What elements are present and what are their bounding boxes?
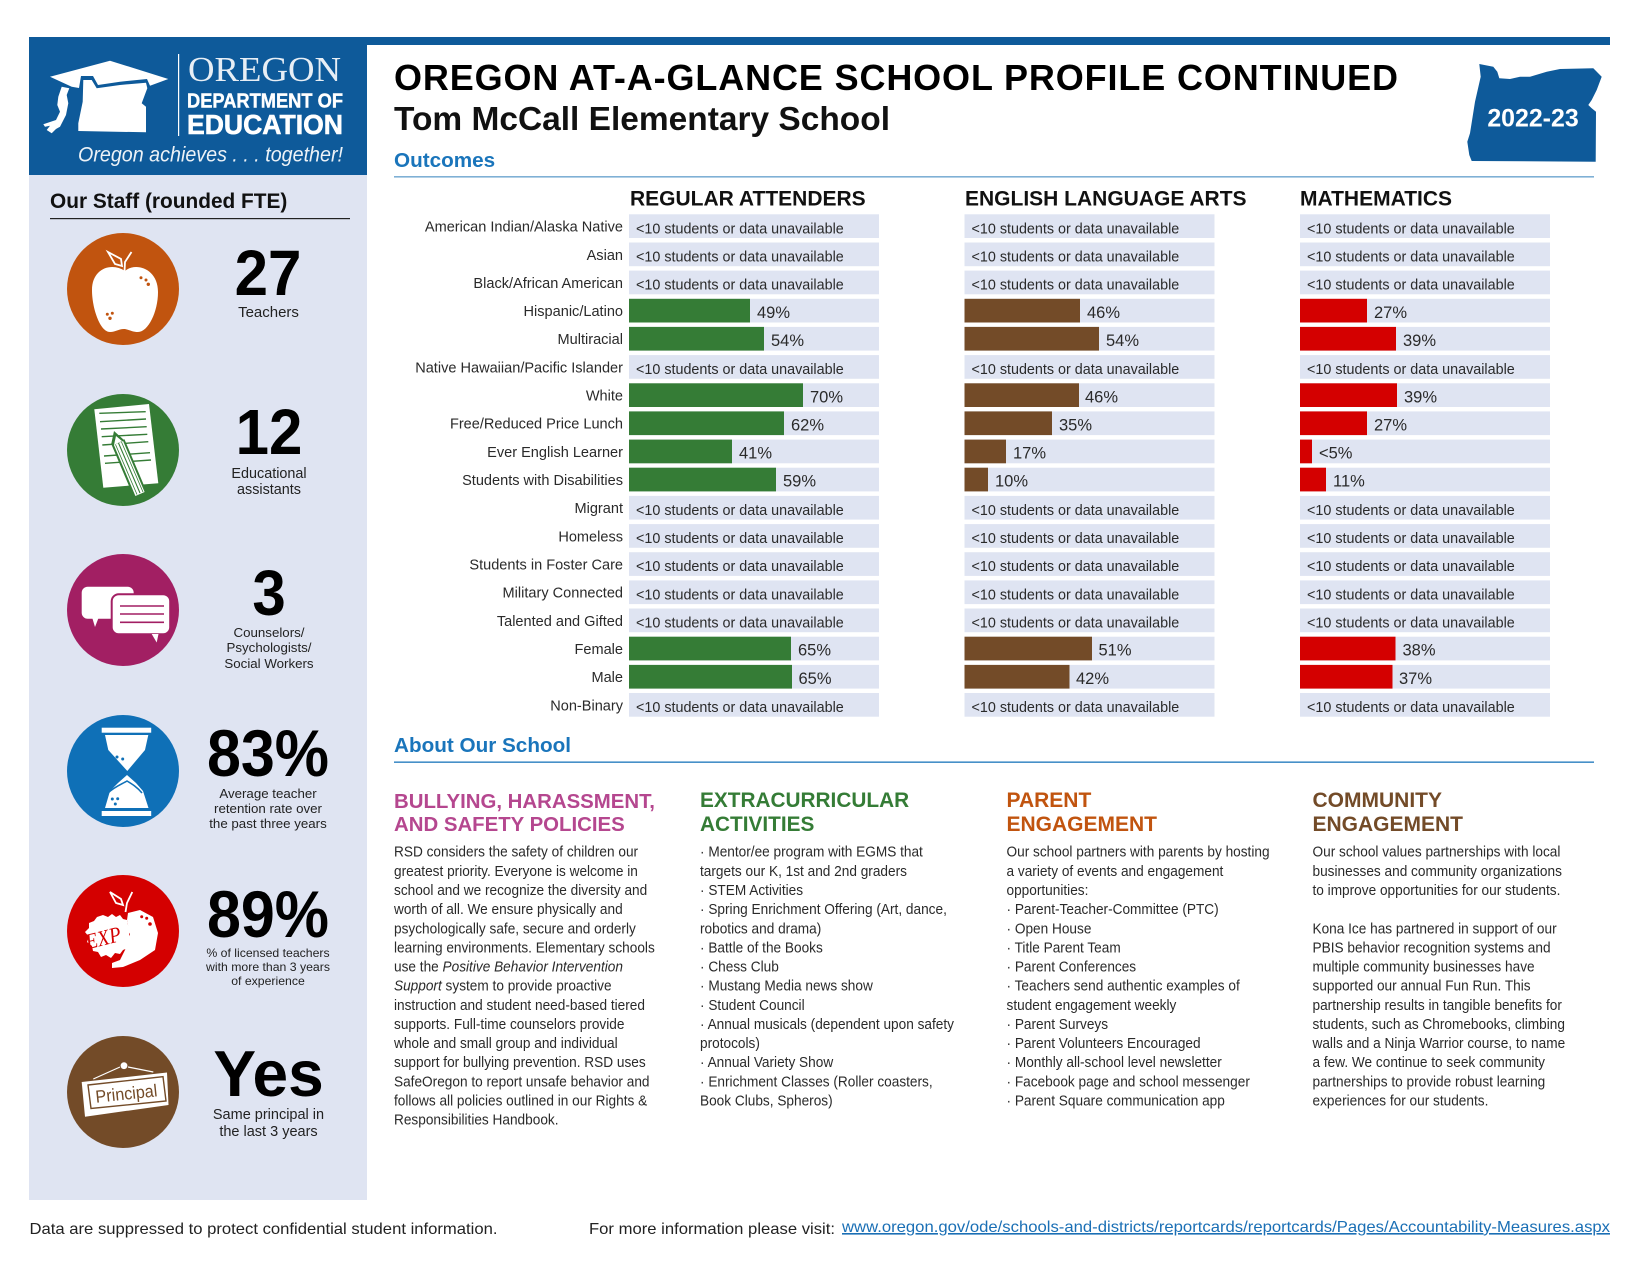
group labels for the outcomes charts: Ever English Learner	[487, 445, 623, 461]
logo: Oregon Department of Education: Oregon achieves . . . together!	[78, 144, 343, 166]
chart values	[972, 221, 1179, 716]
caption: teachers: Teachers	[238, 304, 299, 321]
group labels for the outcomes charts: American Indian/Alaska Native	[425, 220, 623, 236]
heading: About Our School: About Our School	[394, 734, 571, 757]
group labels for the outcomes charts: Students in Foster Care	[469, 558, 623, 574]
chart values: <10 students or data unavailable	[636, 278, 844, 294]
body copy: · Parent Surveys	[1006, 1016, 1108, 1033]
chart values: <10 students or data unavailable	[972, 503, 1179, 519]
stat: educational assistants	[67, 394, 307, 506]
body copy: Support system to provide proactive	[394, 978, 612, 995]
group labels for the outcomes charts: Male	[591, 670, 623, 686]
body copy: · Chess Club	[700, 959, 779, 976]
body copy: psychologically safe, secure and orderly	[394, 921, 637, 937]
caption: counselors: Counselors/	[234, 625, 305, 640]
chart values: 17%	[1013, 445, 1046, 463]
logo: Oregon Department of Education: EDUCATION	[187, 109, 343, 140]
text block: bullying, harassment and safety policies	[393, 791, 655, 1129]
body copy: Book Clubs, Spheros)	[700, 1093, 833, 1110]
caption: experience: with more than 3 years	[205, 960, 330, 974]
group labels for the outcomes charts	[415, 220, 624, 714]
chart values: <5%	[1319, 445, 1353, 463]
icon: bitten apple with EXP: EXP	[82, 921, 124, 954]
chart values: <10 students or data unavailable	[1307, 250, 1515, 266]
body copy: students, such as Chromebooks, climbing	[1312, 1016, 1565, 1033]
chart values: 42%	[1076, 670, 1109, 688]
body copy: · Monthly all-school level newsletter	[1006, 1055, 1222, 1071]
icon: Oregon map with school year: 2022-23	[1487, 104, 1579, 132]
chart values: 70%	[810, 388, 843, 406]
body copy: robotics and drama)	[700, 921, 821, 937]
body copy: Responsibilities Handbook.	[394, 1112, 559, 1129]
chart values: 27%	[1374, 416, 1407, 434]
body copy: · Mustang Media news show	[700, 978, 873, 995]
chart values: 39%	[1403, 332, 1436, 350]
body copy: learning environments. Elementary schools	[394, 940, 655, 957]
body copy	[393, 844, 655, 1129]
chart values: 39%	[1404, 388, 1437, 406]
chart values: <10 students or data unavailable	[1307, 616, 1515, 632]
chart values: <10 students or data unavailable	[972, 616, 1179, 632]
chart values: <10 students or data unavailable	[1307, 278, 1515, 294]
group labels for the outcomes charts: Black/African American	[473, 276, 623, 292]
stat: counselors	[67, 554, 314, 671]
body copy: whole and small group and individual	[393, 1036, 618, 1052]
chart values: <10 students or data unavailable	[972, 559, 1179, 575]
caption: counselors: Social Workers	[224, 656, 314, 671]
chart title: ENGLISH LANGUAGE ARTS	[965, 188, 1247, 211]
icon: principal sign	[67, 1036, 179, 1148]
body copy: · Parent-Teacher-Committee (PTC)	[1006, 902, 1219, 918]
icon: bitten apple with EXP	[67, 875, 179, 987]
icon: apple	[67, 233, 179, 345]
body copy: walls and a Ninja Warrior course, to name	[1312, 1036, 1565, 1052]
chart values: <10 students or data unavailable	[1307, 531, 1515, 547]
body copy: partnerships to provide robust learning	[1312, 1074, 1545, 1091]
body copy: Kona Ice has partnered in support of our	[1312, 921, 1557, 937]
caption: counselors: Psychologists/	[226, 640, 312, 655]
group labels for the outcomes charts: Multiracial	[558, 332, 623, 348]
chart values: 65%	[798, 642, 831, 660]
chart values: 27%	[1374, 304, 1407, 322]
chart values: <10 students or data unavailable	[636, 700, 844, 716]
body copy: · Enrichment Classes (Roller coasters,	[700, 1074, 933, 1091]
chart track backgrounds	[629, 214, 879, 717]
chart values: <10 students or data unavailable	[972, 531, 1179, 547]
text block: parent engagement	[1006, 789, 1270, 1110]
body copy: multiple community businesses have	[1312, 959, 1535, 976]
body copy: opportunities:	[1006, 882, 1088, 899]
chart title: MATHEMATICS	[1300, 188, 1452, 211]
caption: experience: % of licensed teachers	[206, 946, 330, 960]
logo: Oregon Department of Education	[29, 37, 367, 175]
heading: AND SAFETY POLICIES	[394, 814, 625, 836]
chart values: 41%	[739, 445, 772, 463]
body copy: · Annual Variety Show	[700, 1055, 834, 1071]
chart values: 46%	[1085, 388, 1118, 406]
body copy: · Parent Volunteers Encouraged	[1006, 1036, 1201, 1052]
chart values: 49%	[757, 304, 790, 322]
caption: educational assistants: Educational	[231, 466, 307, 482]
value: 89%: 89%	[207, 879, 329, 952]
body copy: supported our annual Fun Run. This	[1312, 978, 1531, 995]
body copy: · Mentor/ee program with EGMS that	[700, 844, 923, 861]
body copy: follows all policies outlined in our Rights &	[394, 1093, 648, 1110]
bar chart: english language arts	[964, 188, 1247, 717]
body copy: · Parent Conferences	[1006, 959, 1136, 976]
group labels for the outcomes charts: White	[586, 389, 623, 405]
value: 27: 27	[235, 238, 301, 309]
body copy: · Open House	[1006, 921, 1091, 937]
subtitle: school name: Tom McCall Elementary School	[394, 100, 890, 137]
body copy: Our school partners with parents by hosting	[1006, 844, 1270, 861]
body copy: · Parent Square communication app	[1006, 1093, 1225, 1110]
chart values: <10 students or data unavailable	[636, 587, 844, 603]
heading: ACTIVITIES	[700, 813, 815, 836]
chart title: REGULAR ATTENDERS	[630, 188, 866, 211]
chart track backgrounds	[964, 214, 1214, 717]
chart values: <10 students or data unavailable	[972, 700, 1179, 716]
icon: principal sign: Principal	[94, 1080, 158, 1107]
group labels for the outcomes charts: Military Connected	[503, 586, 623, 602]
value: Yes: Yes	[213, 1036, 324, 1110]
chart values: <10 students or data unavailable	[636, 362, 844, 378]
chart values: 11%	[1333, 473, 1365, 491]
chart values: <10 students or data unavailable	[1307, 503, 1515, 519]
body copy: experiences for our students.	[1312, 1093, 1488, 1110]
heading: COMMUNITY	[1312, 789, 1442, 812]
stat: teacher retention	[67, 715, 329, 831]
body copy: · Annual musicals (dependent upon safety	[700, 1016, 955, 1033]
body copy: · Facebook page and school messenger	[1006, 1074, 1250, 1091]
body copy: · Teachers send authentic examples of	[1006, 978, 1240, 995]
group labels for the outcomes charts: Non-Binary	[550, 698, 624, 714]
heading: PARENT	[1006, 789, 1091, 812]
caption: educational assistants: assistants	[237, 482, 301, 498]
divider: about	[394, 762, 1594, 763]
body copy: use the Positive Behavior Intervention	[394, 959, 623, 976]
body copy: school and we recognize the diversity and	[394, 882, 647, 899]
logo: Oregon Department of Education: DEPARTMENT OF	[187, 90, 343, 112]
panel: staff sidebar background	[29, 175, 367, 1200]
chart values: <10 students or data unavailable	[636, 221, 844, 237]
chart track backgrounds	[1300, 214, 1550, 717]
stat: same principal	[67, 1036, 324, 1148]
value: 12: 12	[236, 397, 302, 468]
heading: BULLYING, HARASSMENT,	[394, 791, 655, 813]
chart values: <10 students or data unavailable	[972, 221, 1179, 237]
heading: Outcomes: Outcomes	[394, 149, 495, 172]
chart values: <10 students or data unavailable	[972, 278, 1179, 294]
body copy: support for bullying prevention. RSD uses	[394, 1055, 646, 1071]
heading: Our Staff: Our Staff (rounded FTE)	[50, 190, 287, 213]
stat: licensed teacher experience	[67, 875, 330, 988]
chart values: <10 students or data unavailable	[1307, 587, 1515, 603]
value: 83%: 83%	[207, 718, 329, 791]
body copy: to improve opportunities for our students.	[1312, 882, 1560, 899]
chart values: <10 students or data unavailable	[972, 587, 1179, 603]
chart values: <10 students or data unavailable	[636, 559, 844, 575]
chart values: 62%	[791, 416, 824, 434]
chart values: 35%	[1059, 416, 1092, 434]
title: OREGON AT-A-GLANCE SCHOOL PROFILE CONTINUED	[394, 57, 1398, 98]
group labels for the outcomes charts: Asian	[587, 248, 623, 264]
body copy: · Spring Enrichment Offering (Art, dance,	[700, 902, 947, 918]
body copy: greatest priority. Everyone is welcome in	[394, 863, 638, 880]
body copy: protocols)	[700, 1036, 760, 1052]
body copy: businesses and community organizations	[1312, 863, 1562, 880]
body copy: SafeOregon to report unsafe behavior and	[394, 1074, 650, 1091]
chart values: <10 students or data unavailable	[972, 250, 1179, 266]
heading: ENGAGEMENT	[1312, 813, 1463, 836]
text block: community engagement	[1312, 789, 1565, 1110]
group labels for the outcomes charts: Hispanic/Latino	[524, 304, 623, 320]
chart values: 51%	[1098, 642, 1132, 660]
chart values: <10 students or data unavailable	[636, 616, 844, 632]
value: 3: 3	[252, 558, 286, 629]
group labels for the outcomes charts: Homeless	[558, 529, 623, 545]
body copy	[700, 844, 955, 1110]
footer: link: www.oregon.gov/ode/schools-and-districts/reportcards/reportcards/Pages/Accountability-Measures.aspx	[841, 1219, 1610, 1236]
body copy: a variety of events and engagement	[1006, 863, 1223, 880]
logo: Oregon Department of Education: OREGON	[188, 50, 341, 89]
chart measure bars	[1300, 299, 1397, 689]
chart values: <10 students or data unavailable	[1307, 362, 1515, 378]
heading: ENGAGEMENT	[1006, 813, 1157, 836]
group labels for the outcomes charts: Talented and Gifted	[497, 614, 623, 630]
chart values: <10 students or data unavailable	[636, 531, 844, 547]
body copy: · Title Parent Team	[1006, 940, 1121, 957]
caption: retention: Average teacher	[219, 786, 317, 801]
chart values: 54%	[771, 332, 804, 350]
chart values: <10 students or data unavailable	[636, 250, 844, 266]
body copy	[1312, 844, 1565, 1110]
caption: experience: of experience	[231, 974, 305, 988]
body copy: student engagement weekly	[1006, 997, 1177, 1014]
bar chart: mathematics	[1300, 188, 1550, 717]
bar chart: regular attenders	[629, 188, 879, 717]
icon: speech bubbles	[67, 554, 179, 666]
chart values: <10 students or data unavailable	[1307, 700, 1515, 716]
body copy: worth of all. We ensure physically and	[393, 902, 623, 918]
footer: more information: For more information please visit:	[589, 1221, 835, 1238]
footer: suppression note: Data are suppressed to protect confidential student information.	[30, 1221, 498, 1238]
caption: retention: the past three years	[209, 816, 327, 831]
icon: paper and pencil	[67, 394, 179, 506]
chart measure bars	[964, 299, 1099, 689]
group labels for the outcomes charts: Native Hawaiian/Pacific Islander	[415, 360, 623, 376]
chart values: 37%	[1399, 670, 1432, 688]
chart values: <10 students or data unavailable	[1307, 221, 1515, 237]
body copy: partnership results in tangible benefits for	[1312, 997, 1562, 1014]
chart measure bars	[629, 299, 803, 689]
caption: principal: Same principal in	[213, 1107, 324, 1123]
chart values: <10 students or data unavailable	[1307, 559, 1515, 575]
body copy: · Battle of the Books	[700, 940, 823, 957]
chart values: 10%	[995, 473, 1028, 491]
chart values: 46%	[1087, 304, 1120, 322]
body copy: Our school values partnerships with local	[1312, 844, 1560, 861]
body copy: instruction and student need-based tiered	[394, 997, 645, 1014]
stat: teachers	[67, 233, 301, 345]
body copy: PBIS behavior recognition systems and	[1312, 940, 1551, 957]
icon: hourglass	[67, 715, 179, 827]
body copy: RSD considers the safety of children our	[394, 844, 638, 861]
group labels for the outcomes charts: Students with Disabilities	[462, 473, 623, 489]
divider: outcomes	[394, 176, 1594, 178]
chart values	[1307, 221, 1515, 716]
body copy	[1006, 844, 1270, 1110]
chart values: <10 students or data unavailable	[636, 503, 844, 519]
caption: principal: the last 3 years	[219, 1124, 318, 1140]
chart values: 59%	[783, 473, 816, 491]
group labels for the outcomes charts: Female	[574, 642, 623, 658]
body copy: targets our K, 1st and 2nd graders	[700, 863, 907, 880]
chart values: 54%	[1106, 332, 1139, 350]
group labels for the outcomes charts: Free/Reduced Price Lunch	[450, 417, 623, 433]
top banner bar	[29, 37, 1610, 45]
group labels for the outcomes charts: Migrant	[574, 501, 623, 517]
body copy: supports. Full-time counselors provide	[394, 1016, 624, 1033]
heading: EXTRACURRICULAR	[700, 789, 909, 812]
chart values: <10 students or data unavailable	[972, 362, 1179, 378]
chart values: 65%	[798, 670, 832, 688]
icon: Oregon map with school year	[1467, 64, 1602, 162]
body copy: · STEM Activities	[700, 882, 803, 899]
chart values: 38%	[1402, 642, 1436, 660]
chart values	[636, 221, 844, 716]
text block: extracurricular activities	[700, 789, 955, 1110]
caption: retention: retention rate over	[214, 801, 323, 816]
body copy: a few. We continue to seek community	[1312, 1055, 1546, 1071]
body copy: · Student Council	[700, 997, 805, 1014]
